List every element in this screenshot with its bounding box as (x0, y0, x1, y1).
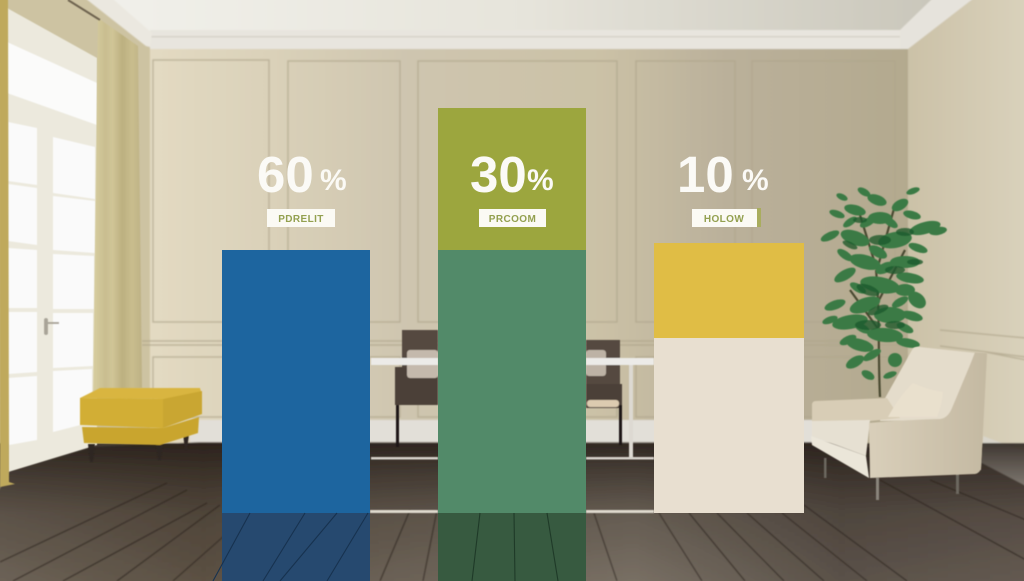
label: 30 percent (479, 209, 546, 227)
skirting board (190, 420, 1024, 486)
bar: 10% yellow and cream (654, 243, 804, 513)
dining table and chairs (370, 330, 654, 513)
figure: 10 percent (677, 146, 769, 203)
label: 60 percent (267, 209, 335, 227)
label: 60 percent: PDRELIT (278, 214, 324, 225)
crown moulding (85, 0, 974, 49)
curtains (0, 0, 142, 487)
window with french doors (7, 8, 97, 472)
left wall above window (0, 0, 150, 445)
ceiling (105, 0, 940, 32)
figure: 10 percent: % (742, 164, 769, 197)
wall panelling (142, 60, 1024, 417)
bar: 60% blue (213, 250, 370, 581)
figure: 30 percent: % (527, 164, 554, 197)
figure: 10 percent: 10 (677, 146, 734, 203)
door handle (44, 318, 59, 335)
figure: 60 percent: 60 (257, 146, 314, 203)
bar: 30% olive and green (438, 108, 586, 581)
back wall (138, 48, 910, 448)
label: 30 percent: PRCOOM (489, 214, 536, 225)
potted plant (819, 185, 948, 397)
right wall (908, 0, 1024, 490)
figure: 60 percent (257, 146, 347, 203)
figure: 30 percent: 30 (470, 146, 527, 203)
armchair (811, 347, 987, 500)
figure: 30 percent (470, 146, 554, 203)
label: 10 percent: HOLOW (704, 214, 744, 225)
floor (0, 442, 1024, 581)
figure: 60 percent: % (320, 164, 347, 197)
label: 10 percent (692, 208, 761, 227)
chart: 60 30 10 colour proportions (213, 108, 804, 581)
yellow ottoman (80, 388, 202, 462)
